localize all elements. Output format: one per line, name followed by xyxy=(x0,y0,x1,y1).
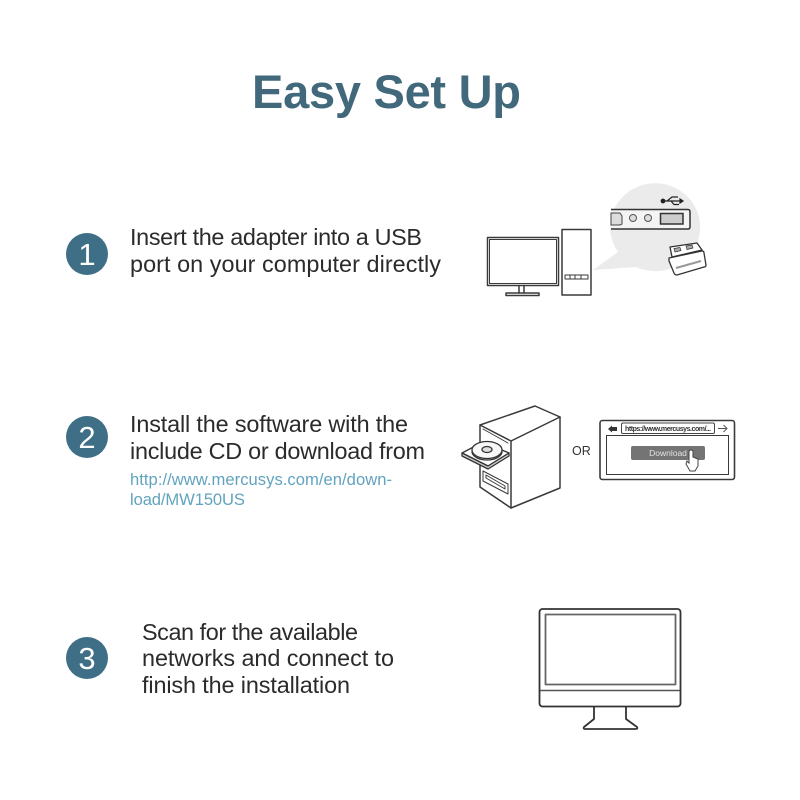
illustration: computer tower with CD tray xyxy=(462,406,560,508)
illustration: computer with USB port and adapter xyxy=(488,183,706,296)
step 3 text: Scan for the available xyxy=(142,619,358,645)
icon: zoom callout circle xyxy=(593,183,700,271)
step 2 number badge: 2 xyxy=(78,420,96,455)
step 2 text: include CD or download from xyxy=(130,438,425,464)
step 1 text: port on your computer directly xyxy=(130,251,441,277)
title: Easy Set Up xyxy=(252,65,521,118)
step 1 number badge xyxy=(66,233,108,275)
icon: hand cursor xyxy=(686,450,698,471)
step 3 number badge: 3 xyxy=(78,641,96,676)
step 2 download link: load/MW150US xyxy=(130,490,245,509)
illustration: browser download window xyxy=(600,420,734,480)
icon: tower xyxy=(562,230,591,295)
step 2 text: Install the software with the xyxy=(130,411,408,437)
step 1 text: Insert the adapter into a USB xyxy=(130,224,422,250)
icon: forward arrow xyxy=(718,425,727,432)
icon: USB adapter xyxy=(669,243,706,275)
step 2 number badge xyxy=(66,416,108,458)
icon: back arrow xyxy=(608,426,617,432)
icon: monitor xyxy=(488,238,558,296)
address bar: https://www.mercusys.com/... xyxy=(625,426,711,433)
download button: Download xyxy=(649,448,687,458)
icon: tower case xyxy=(480,406,560,508)
step 3 number badge xyxy=(66,637,108,679)
browser content area xyxy=(606,436,728,474)
illustration: desktop monitor xyxy=(540,609,680,729)
browser frame xyxy=(600,420,734,480)
icon: USB symbol xyxy=(661,197,683,204)
icon: CD tray xyxy=(462,442,509,469)
step 3 text: networks and connect to xyxy=(142,645,394,671)
step 1 number badge: 1 xyxy=(78,237,96,272)
step 2 download link: http://www.mercusys.com/en/down- xyxy=(130,470,392,489)
step 3 text: finish the installation xyxy=(142,672,350,698)
icon: USB port panel xyxy=(611,210,690,229)
label: OR: OR xyxy=(572,444,591,458)
